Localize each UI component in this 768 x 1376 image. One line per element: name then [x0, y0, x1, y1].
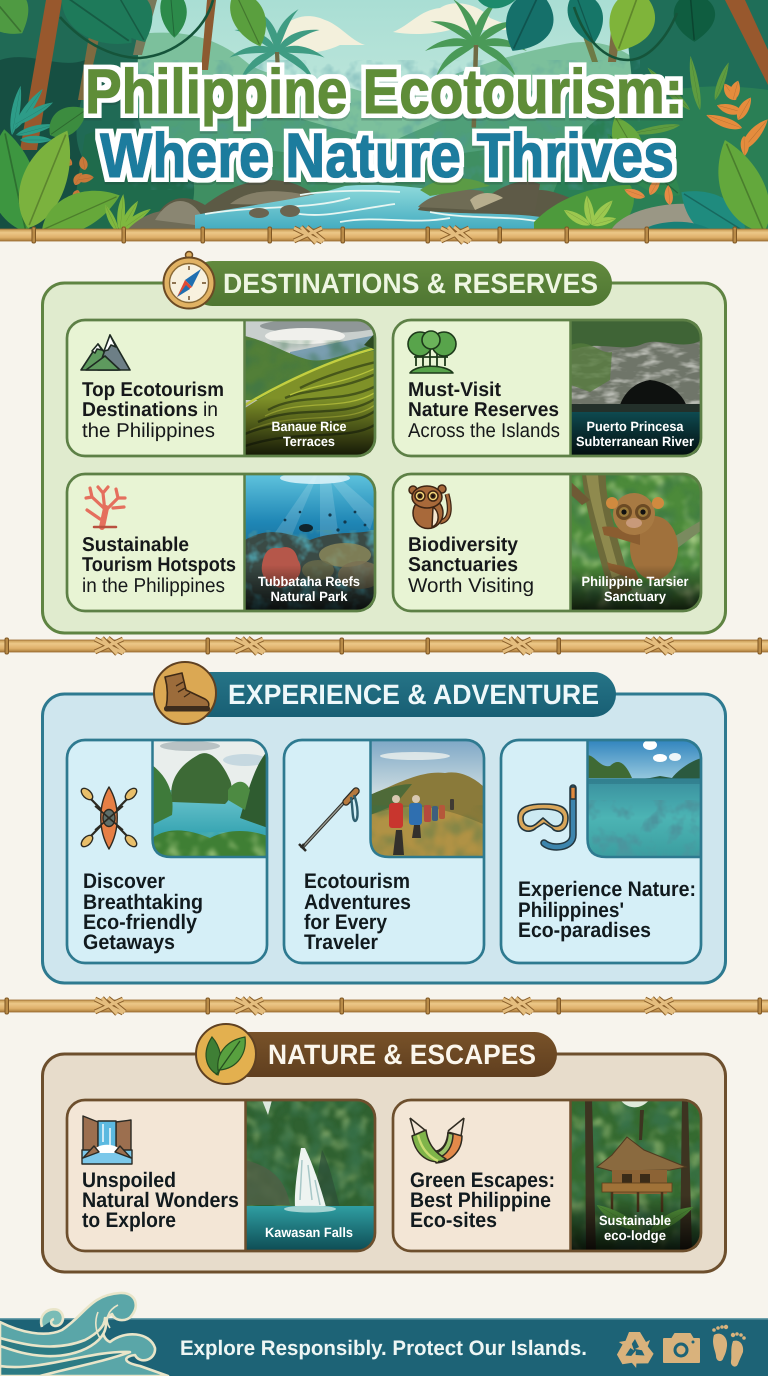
heading: ecotourism adventures: Adventures [304, 891, 411, 914]
heading: biodiversity sanctuaries: Worth Visiting [408, 575, 534, 597]
caption: Puerto Princesa Subterranean River [576, 419, 695, 449]
heading: discover breathtaking getaways: Breathtaking [83, 891, 203, 914]
card: unspoiled natural wonders [67, 1099, 376, 1252]
canopy fronds [0, 0, 715, 52]
photo: hikers on ridge [370, 739, 485, 857]
caption: Puerto Princesa Subterranean River: Subterranean River [576, 434, 695, 449]
photo: sustainable eco-lodge [571, 1099, 702, 1252]
photo: Kawasan Falls [245, 1099, 376, 1252]
footer slogan: Explore Responsibly. Protect Our Islands. [180, 1337, 587, 1360]
heading: sustainable tourism hotspots: in the Philippines [82, 575, 225, 597]
section heading: nature and escapes [225, 1032, 557, 1077]
heading: ecotourism adventures [304, 870, 411, 954]
icon: recycle [612, 1332, 656, 1372]
photo: clear tropical sea [587, 739, 702, 857]
heading: biodiversity sanctuaries [408, 534, 534, 597]
heading: ecotourism adventures: Traveler [304, 931, 378, 954]
heading: ecotourism adventures: Ecotourism [304, 870, 410, 893]
heading: top ecotourism destinations [82, 379, 224, 442]
heading: discover breathtaking getaways: Eco-friendly [83, 911, 197, 934]
caption: Philippine Tarsier Sanctuary: Sanctuary [604, 589, 666, 604]
card: discover breathtaking getaways [67, 739, 268, 963]
heading: sustainable tourism hotspots: Tourism Hotspots [82, 554, 236, 576]
caption: Banaue Rice Terraces [272, 419, 347, 449]
heading: green escapes: Green Escapes: [410, 1169, 555, 1192]
heading: green escapes [410, 1169, 555, 1232]
title [85, 57, 683, 191]
heading: experience nature: Philippines' [518, 899, 624, 922]
header jungle illustration [0, 0, 768, 251]
bamboo divider: top [0, 227, 768, 243]
section heading: destinations and reserves [190, 261, 612, 306]
heading: top ecotourism destinations: the Philippines [82, 420, 215, 442]
photo: Tubbataha Reefs Natural Park [245, 472, 382, 612]
caption: Banaue Rice Terraces: Banaue Rice [272, 419, 347, 434]
heading: discover breathtaking getaways [83, 870, 203, 954]
icon: forest [408, 331, 456, 373]
icon: footprints [712, 1325, 746, 1367]
panel: destinations and reserves [42, 252, 726, 633]
caption: Banaue Rice Terraces: Terraces [283, 434, 335, 449]
right-side foliage [636, 56, 729, 134]
panel: experience and adventure [42, 662, 726, 983]
photo: Philippine Tarsier Sanctuary [571, 474, 702, 612]
icon: mountains [81, 335, 130, 370]
heading: sustainable tourism hotspots [82, 534, 236, 597]
card: must-visit nature reserves [393, 320, 702, 457]
caption: Puerto Princesa Subterranean River: Puerto Princesa [586, 419, 684, 434]
section heading: experience and adventure [175, 672, 616, 717]
heading: biodiversity sanctuaries: Biodiversity [408, 534, 519, 556]
heading: green escapes: Best Philippine [410, 1189, 551, 1212]
caption: Tubbataha Reefs Natural Park [258, 574, 360, 604]
caption: Kawasan Falls: Kawasan Falls [265, 1225, 353, 1240]
icon: kayak and paddles [79, 786, 139, 849]
card: green escapes [393, 1099, 702, 1252]
caption: sustainable eco-lodge [599, 1213, 671, 1243]
caption: sustainable eco-lodge: eco-lodge [604, 1228, 666, 1243]
heading: unspoiled natural wonders: to Explore [82, 1209, 176, 1232]
card: top ecotourism destinations [67, 319, 380, 457]
panel: nature and escapes [42, 1024, 726, 1272]
heading: ecotourism adventures: for Every [304, 911, 387, 934]
icon: camera [664, 1334, 699, 1362]
icon: waterfall [82, 1116, 132, 1164]
section heading: destinations and reserves: DESTINATIONS & RESERVES [223, 268, 598, 299]
heading: unspoiled natural wonders [82, 1169, 239, 1232]
heading: top ecotourism destinations: in [203, 399, 218, 421]
icon: trekking pole [299, 791, 358, 851]
palm trunks [20, 0, 62, 150]
photo: island lagoon [152, 739, 268, 857]
icon: hiking boot [154, 662, 216, 724]
card: sustainable tourism hotspots [67, 472, 382, 612]
card: experience nature [501, 739, 702, 963]
icon: snorkel mask [518, 787, 576, 847]
card: biodiversity sanctuaries [393, 474, 702, 612]
caption: Tubbataha Reefs Natural Park: Natural Park [270, 589, 348, 604]
title: Where Nature Thrives [100, 121, 674, 191]
ferns and ground foliage left [10, 86, 53, 144]
heading: must-visit nature reserves [408, 379, 560, 442]
rocks and river [159, 180, 570, 217]
card: ecotourism adventures [284, 739, 485, 963]
heading: discover breathtaking getaways: Discover [83, 870, 165, 893]
vines [60, 0, 213, 58]
icon: coral [86, 487, 125, 527]
heading: must-visit nature reserves: Across the Islands [408, 420, 560, 442]
footer waves [0, 1293, 168, 1376]
heading: experience nature: Experience Nature: [518, 878, 696, 901]
heading: discover breathtaking getaways: Getaways [83, 931, 175, 954]
caption: Philippine Tarsier Sanctuary: Philippine Tarsier [582, 574, 689, 589]
heading: unspoiled natural wonders: Natural Wonders [82, 1189, 239, 1212]
caption: Philippine Tarsier Sanctuary [582, 574, 689, 604]
heading: experience nature: Eco-paradises [518, 919, 651, 942]
title: Philippine Ecotourism: [85, 57, 683, 127]
background palms [229, 5, 325, 119]
heading: top ecotourism destinations: Destinations [82, 399, 198, 421]
icon: compass [164, 252, 214, 308]
section heading: experience and adventure: EXPERIENCE & ADVENTURE [228, 679, 599, 710]
icon: hammock [410, 1118, 464, 1163]
photo: Banaue Rice Terraces [245, 319, 380, 457]
section heading: nature and escapes: NATURE & ESCAPES [268, 1039, 536, 1070]
bamboo divider: lower [0, 998, 768, 1014]
heading: green escapes: Eco-sites [410, 1209, 497, 1232]
photo: Puerto Princesa Subterranean River [571, 320, 702, 457]
decor bottom-right fill [648, 222, 708, 229]
footer band [0, 1293, 768, 1376]
heading: biodiversity sanctuaries: Sanctuaries [408, 554, 518, 576]
heading: must-visit nature reserves: Must-Visit [408, 379, 501, 401]
heading: unspoiled natural wonders: Unspoiled [82, 1169, 176, 1192]
heading: experience nature [518, 878, 696, 942]
icon: tarsier [409, 485, 449, 528]
icon: green leaf [196, 1024, 256, 1084]
heading: top ecotourism destinations: Top Ecotourism [82, 379, 224, 401]
bamboo divider: middle [0, 638, 768, 654]
heading: sustainable tourism hotspots: Sustainable [82, 534, 189, 556]
caption: Tubbataha Reefs Natural Park: Tubbataha Reefs [258, 574, 360, 589]
heading: must-visit nature reserves: Nature Reserves [408, 399, 559, 421]
caption: sustainable eco-lodge: Sustainable [599, 1213, 671, 1228]
